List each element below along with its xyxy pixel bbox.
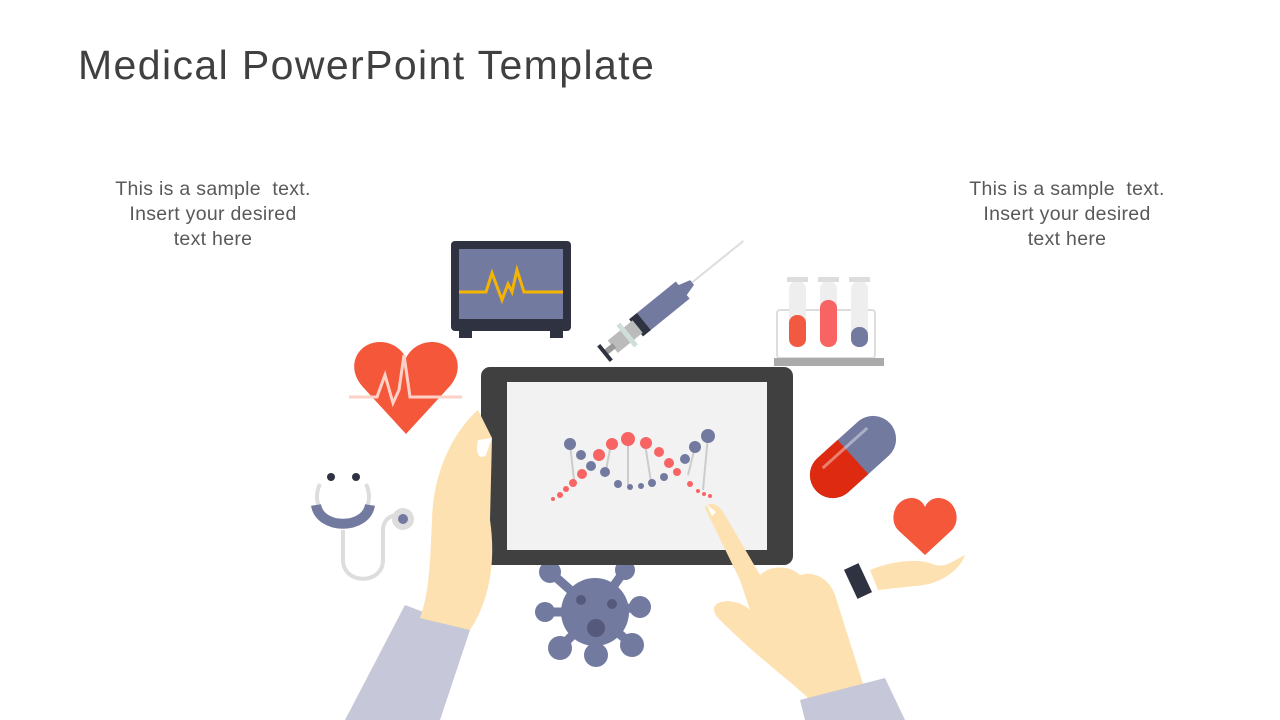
icon: heart with pulse: [349, 342, 462, 434]
text block right: [969, 178, 1165, 250]
text block left: This is a sample text.: [115, 178, 311, 200]
text block left: text here: [174, 228, 252, 250]
tablet: [481, 367, 793, 565]
text block right: Insert your desired: [983, 203, 1151, 225]
icon: hand holding heart: [844, 498, 965, 599]
icon: monitor: [451, 241, 571, 338]
right hand and arm: [705, 504, 905, 720]
icon: test tubes: [774, 277, 884, 366]
icon: virus: [535, 560, 651, 667]
text block left: [115, 178, 311, 250]
icon: syringe: [595, 230, 752, 365]
text block right: text here: [1028, 228, 1106, 250]
chart: DNA helix: [551, 429, 715, 501]
icon: stethoscope: [316, 473, 414, 579]
text block left: Insert your desired: [129, 203, 297, 225]
icon: pill: [800, 406, 906, 508]
text block right: This is a sample text.: [969, 178, 1165, 200]
title: Medical PowerPoint Template: [78, 42, 655, 88]
left hand and arm: [345, 410, 492, 720]
